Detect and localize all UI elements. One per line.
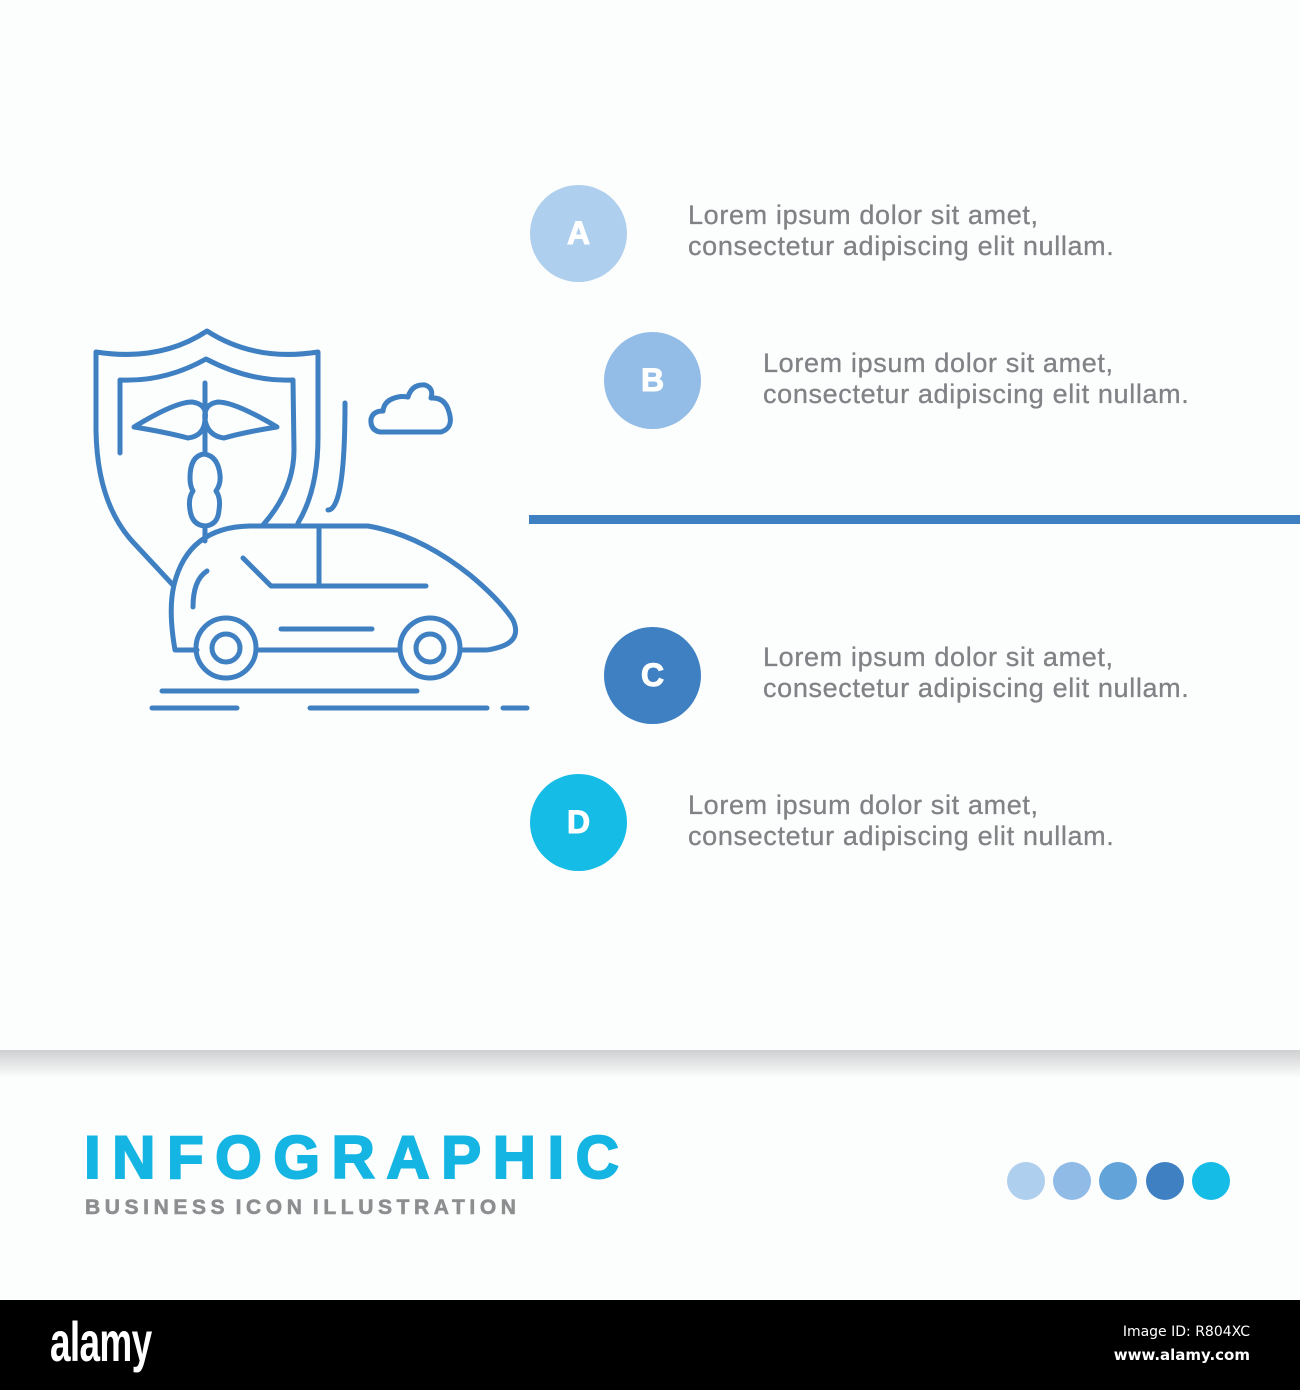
illustration: car insurance shield icon xyxy=(94,328,530,710)
text D: Lorem ipsum dolor sit amet, xyxy=(688,790,1039,820)
badge C: C xyxy=(641,657,664,693)
shield inner outline xyxy=(120,359,294,525)
badge A xyxy=(530,185,627,282)
person figure under umbrella xyxy=(189,454,220,541)
text C: Lorem ipsum dolor sit amet, xyxy=(763,642,1114,672)
text D xyxy=(688,790,1114,851)
umbrella xyxy=(134,383,277,452)
badge C xyxy=(604,627,701,724)
text A: Lorem ipsum dolor sit amet, xyxy=(688,200,1039,230)
badge B xyxy=(604,332,701,429)
footer shadow band xyxy=(0,1050,1300,1078)
text C: consectetur adipiscing elit nullam. xyxy=(763,673,1189,703)
colour dots row xyxy=(1007,1162,1230,1200)
text A: consectetur adipiscing elit nullam. xyxy=(688,231,1114,261)
front wheel xyxy=(196,618,256,678)
car body xyxy=(171,526,516,650)
badge A: A xyxy=(567,215,590,251)
text B: consectetur adipiscing elit nullam. xyxy=(763,379,1189,409)
text B xyxy=(763,348,1189,409)
cloud xyxy=(371,385,450,432)
badge B: B xyxy=(641,362,664,398)
alamy logo: alamy xyxy=(50,1310,152,1373)
website: www.alamy.com xyxy=(1114,1346,1250,1364)
car windows and door xyxy=(193,527,426,607)
road lines xyxy=(152,691,527,708)
rear wheel xyxy=(400,618,460,678)
subtitle: BUSINESS ICON ILLUSTRATION xyxy=(85,1196,521,1219)
infographic title: INFOGRAPHIC xyxy=(84,1124,630,1191)
image id: Image ID: R804XC xyxy=(1123,1324,1250,1340)
badge D: D xyxy=(567,804,590,840)
black footer bar xyxy=(0,1300,1300,1390)
divider line xyxy=(529,515,1300,524)
motion line xyxy=(328,403,345,510)
badge D xyxy=(530,774,627,871)
car door handle line xyxy=(281,626,372,632)
shield outer outline xyxy=(96,331,318,585)
text A xyxy=(688,200,1114,261)
text C xyxy=(763,642,1189,703)
text D: consectetur adipiscing elit nullam. xyxy=(688,821,1114,851)
text B: Lorem ipsum dolor sit amet, xyxy=(763,348,1114,378)
